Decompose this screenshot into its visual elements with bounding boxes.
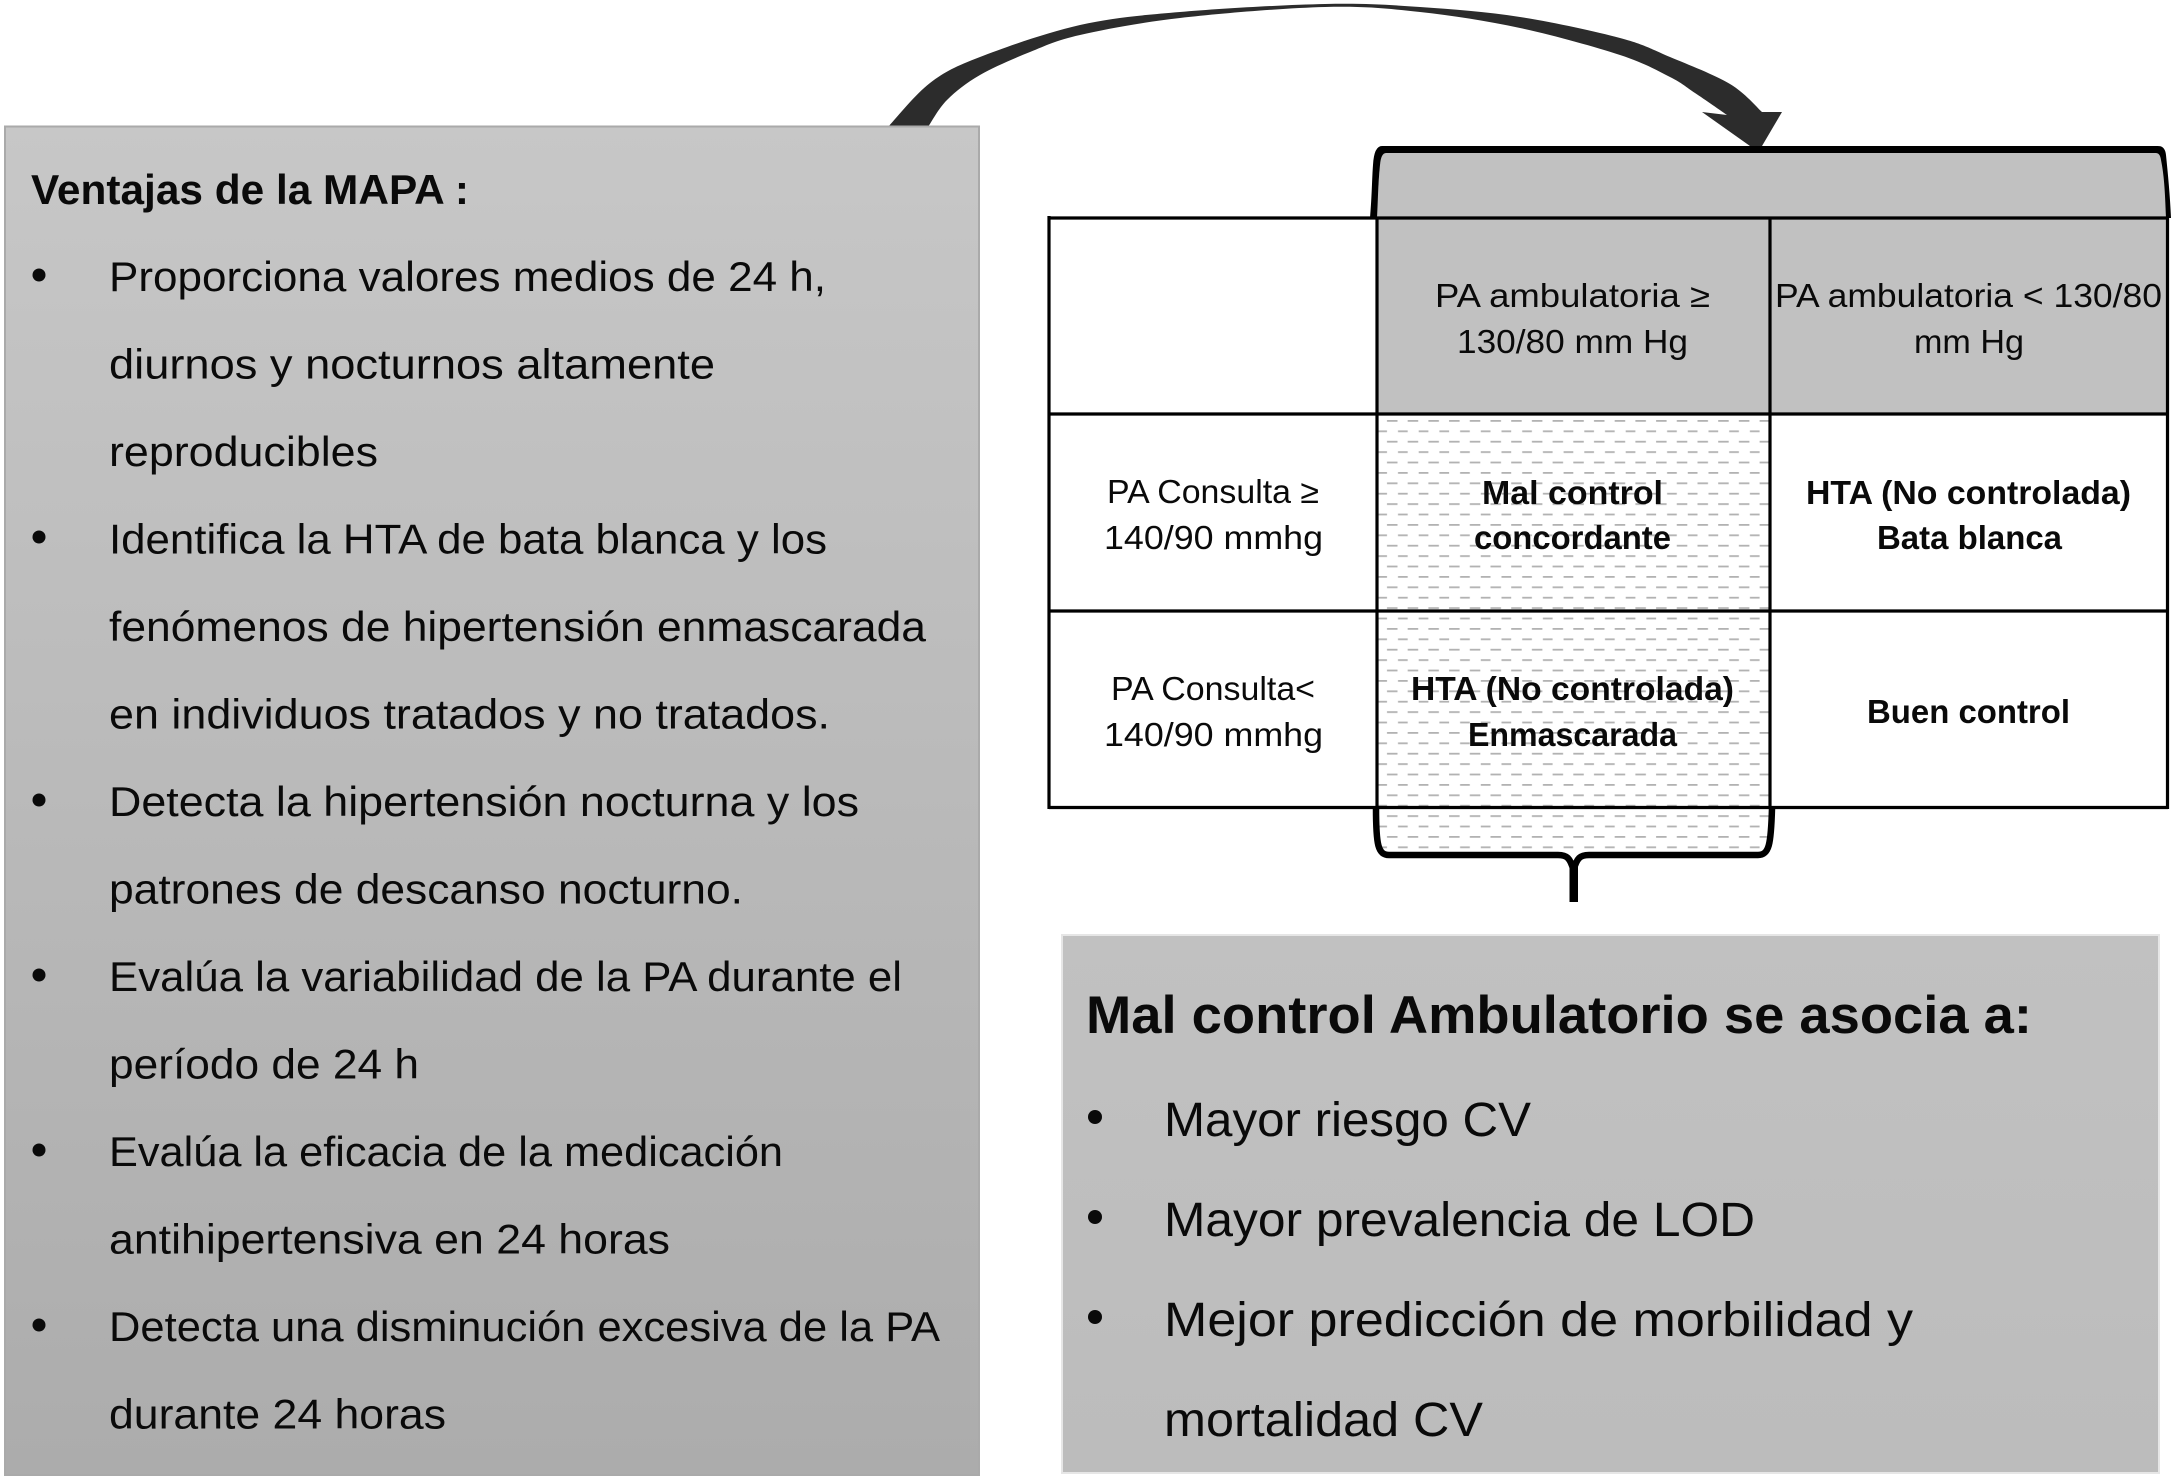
cell: HTA enmascarada (1411, 670, 1734, 753)
row header: consulta baja: 140/90 mmhg (1104, 716, 1323, 753)
bullet: valores medios: Proporciona valores medios de 24 h, (109, 253, 826, 300)
column header: ambulatoria alta: PA ambulatoria ≥ (1435, 277, 1710, 314)
heading: ventajas: Ventajas de la MAPA : (31, 166, 469, 213)
cell: mal control concordante: concordante (1474, 519, 1671, 556)
bullet: variabilidad: Evalúa la variabilidad de la PA durante el (109, 953, 902, 1000)
bullet: eficacia medicación: antihipertensiva en 24 horas (109, 1216, 670, 1262)
curved arrow from left panel to table header (888, 4, 1782, 146)
heading: mal control ambulatorio: Mal control Ambulatorio se asocia a: (1086, 986, 2032, 1045)
bullet: disminución excesiva (32, 1303, 940, 1438)
hatched column (1377, 414, 1770, 856)
bullet: disminución excesiva: Detecta una disminución excesiva de la PA (109, 1303, 940, 1350)
cell: HTA bata blanca (1806, 474, 2131, 556)
bullet: valores medios: diurnos y nocturnos altamente (109, 340, 715, 388)
bullet: hipertensión nocturna: patrones de descanso nocturno. (109, 866, 743, 912)
panel: mal control ambulatorio (1062, 935, 2159, 1473)
bullet: eficacia medicación: Evalúa la eficacia de la medicación (109, 1128, 783, 1175)
bullet: prevalencia LOD: Mayor prevalencia de LOD (1164, 1194, 1755, 1247)
bullet: hipertensión nocturna: Detecta la hipertensión nocturna y los (109, 778, 859, 825)
cell: HTA enmascarada: Enmascarada (1468, 716, 1678, 753)
bullet: variabilidad (32, 953, 902, 1088)
table header bracket (1370, 146, 2171, 218)
table: PA consulta vs ambulatoria (1049, 146, 2171, 902)
bullet: bata blanca: en individuos tratados y no tratados. (109, 690, 830, 738)
column header: ambulatoria alta (1435, 277, 1710, 360)
bullet: predicción morbilidad: Mejor predicción de morbilidad y (1164, 1294, 1913, 1347)
column header: ambulatoria baja (1775, 277, 2162, 360)
bullet: bata blanca: fenómenos de hipertensión enmascarada (109, 603, 927, 650)
row header: consulta alta: 140/90 mmhg (1104, 519, 1323, 556)
bullet: eficacia medicación (32, 1128, 783, 1262)
bullet: predicción morbilidad: mortalidad CV (1164, 1394, 1483, 1447)
bullet: valores medios (32, 253, 826, 475)
row header: consulta alta (1104, 473, 1323, 556)
cell: mal control concordante: Mal control (1482, 474, 1663, 511)
header cell fills (1377, 217, 2167, 414)
panel: ventajas de la MAPA (5, 126, 979, 1475)
row header: consulta baja: PA Consulta< (1111, 670, 1315, 707)
cell: HTA enmascarada: HTA (No controlada) (1411, 670, 1734, 707)
bullet: bata blanca: Identifica la HTA de bata blanca y los (109, 516, 827, 562)
column header: ambulatoria alta: 130/80 mm Hg (1457, 323, 1688, 360)
cell: buen control: Buen control (1867, 693, 2070, 730)
cell: mal control concordante (1474, 474, 1671, 556)
bracket under hatched column (1376, 808, 1772, 902)
bullet: valores medios: reproducibles (109, 428, 378, 475)
bullet: riesgo CV: Mayor riesgo CV (1164, 1094, 1531, 1147)
row header: consulta baja (1104, 670, 1323, 753)
row header: consulta alta: PA Consulta ≥ (1107, 473, 1319, 510)
column header: ambulatoria baja: mm Hg (1914, 323, 2024, 360)
bullet: predicción morbilidad (1088, 1294, 1913, 1447)
column header: ambulatoria baja: PA ambulatoria < 130/80 (1775, 277, 2162, 314)
bullet: disminución excesiva: durante 24 horas (109, 1390, 446, 1438)
bullet: variabilidad: período de 24 h (109, 1040, 419, 1088)
cell: HTA bata blanca: HTA (No controlada) (1806, 474, 2131, 511)
bullet: hipertensión nocturna (32, 778, 859, 912)
cell: HTA bata blanca: Bata blanca (1877, 519, 2063, 556)
table grid (1049, 216, 2168, 809)
bullet: bata blanca (32, 516, 927, 738)
